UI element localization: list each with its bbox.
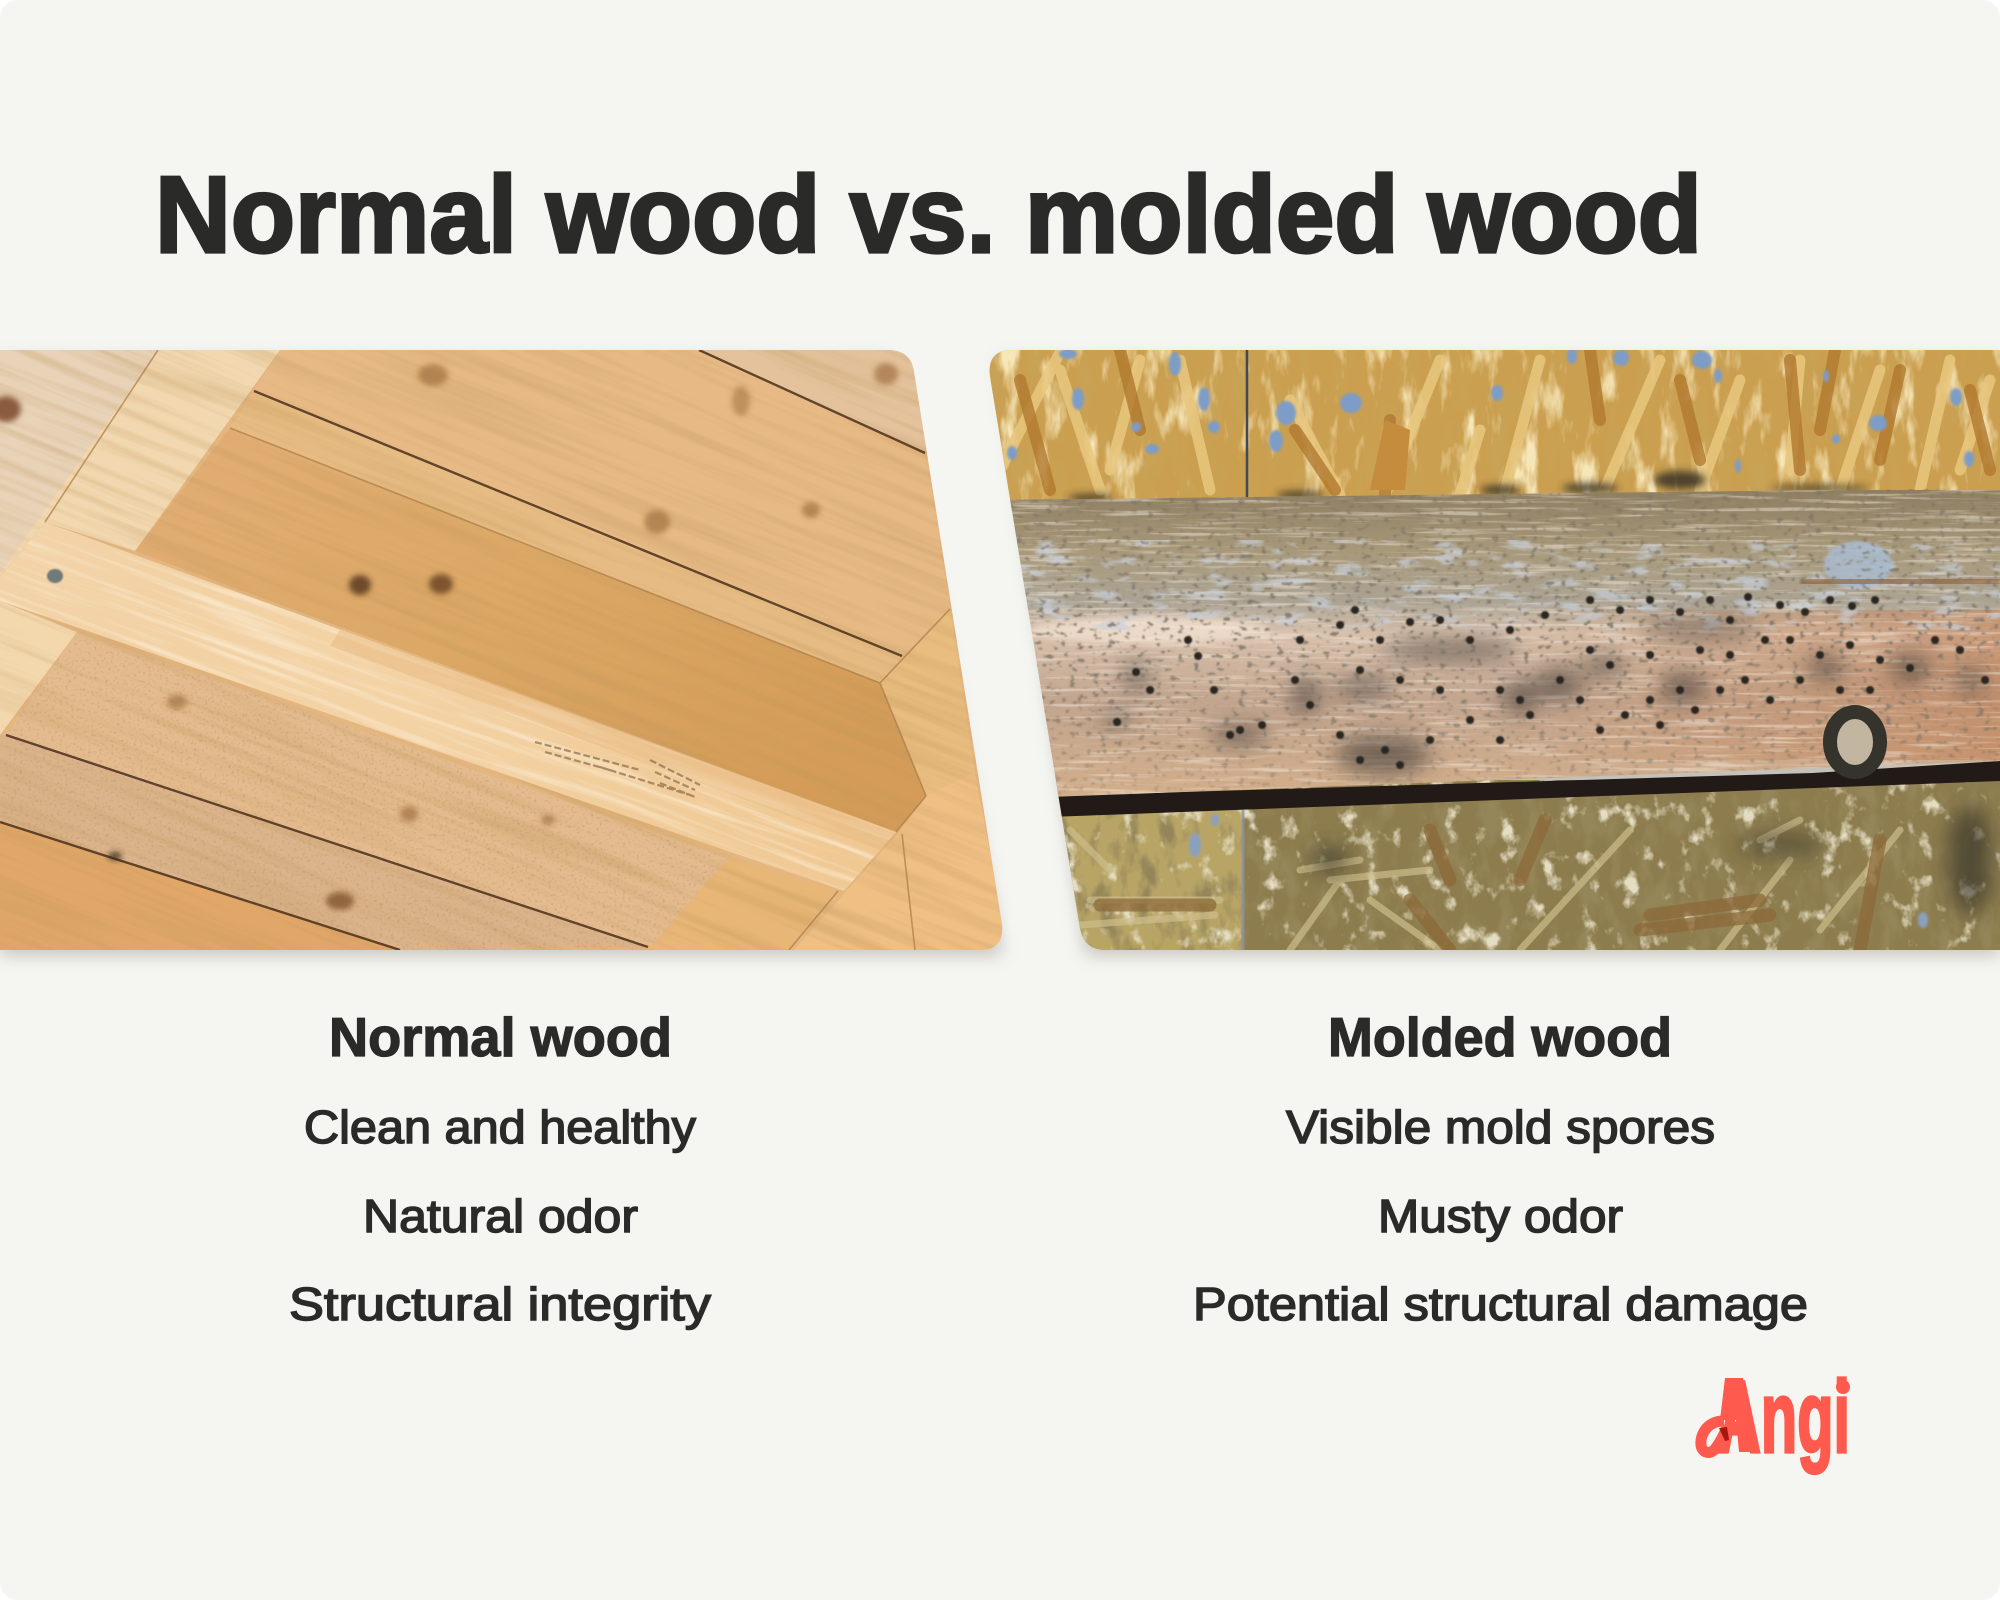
narrow board xyxy=(230,391,902,683)
seams and dark lines xyxy=(0,350,925,950)
upper OSB plank block xyxy=(1370,420,1410,490)
speckled board xyxy=(0,735,648,950)
lower OSB flakes xyxy=(1070,820,1900,950)
logo fold shadow xyxy=(1719,1427,1729,1441)
item: natural odor: Natural odor xyxy=(363,1190,638,1242)
grain texture xyxy=(0,350,1002,950)
round spores xyxy=(1117,597,1985,765)
lower left brighter section xyxy=(1060,808,1243,950)
beam grain xyxy=(980,490,2000,800)
lower OSB board xyxy=(980,780,2000,955)
vertical beam lower section xyxy=(0,601,77,735)
lower OSB dark texture xyxy=(980,780,2000,955)
pale highlights xyxy=(1030,616,1270,644)
logo swirl xyxy=(1701,1421,1727,1452)
middle board xyxy=(135,428,926,832)
title: Normal wood vs. molded wood xyxy=(155,154,1702,276)
lower diagonal beam xyxy=(651,858,838,950)
item: musty odor: Musty odor xyxy=(1378,1190,1623,1242)
heading: molded wood: Molded wood xyxy=(1328,1006,1672,1068)
blue-gray bloom xyxy=(980,540,2000,630)
lower board xyxy=(6,632,728,949)
beam grain xyxy=(0,530,896,891)
upper OSB texture xyxy=(980,350,2000,510)
fine mold specks xyxy=(980,480,2000,810)
soft seams xyxy=(45,350,950,950)
item: visible mold spores: Visible mold spores xyxy=(1286,1101,1715,1153)
lower right boards xyxy=(794,772,1002,950)
lower OSB brown flakes xyxy=(1100,820,1880,950)
salmon tone on right xyxy=(1500,610,2000,760)
mold clusters xyxy=(1101,622,1985,775)
logo dot xyxy=(1836,1380,1850,1394)
speckle on lower boards xyxy=(0,632,728,950)
left column: normal wood xyxy=(289,1006,711,1330)
lower OSB dark patch xyxy=(1312,805,1992,915)
knot ring xyxy=(1830,712,1880,772)
image shadows xyxy=(0,360,2000,955)
item: potential structural damage: Potential structural damage xyxy=(1193,1278,1808,1330)
top left pale boards xyxy=(0,350,158,573)
dark gap xyxy=(1050,761,2000,817)
upper OSB light flakes xyxy=(980,350,2000,510)
logo wordmark: Angi xyxy=(1718,1360,1850,1474)
right column: molded wood xyxy=(1193,1006,1808,1330)
lower seam xyxy=(1242,810,1244,950)
seam xyxy=(1246,350,1248,498)
mold-covered beam xyxy=(980,480,2000,810)
cross beam xyxy=(0,522,896,891)
upper OSB drawn flakes xyxy=(1000,352,1990,500)
panel: normal wood photo xyxy=(0,350,1906,950)
top board xyxy=(254,350,950,656)
bottom left board xyxy=(0,822,400,950)
top right board xyxy=(699,350,930,453)
item: clean and healthy: Clean and healthy xyxy=(304,1101,696,1153)
heading: normal wood: Normal wood xyxy=(329,1006,672,1068)
beam shading xyxy=(330,630,896,850)
upper OSB board xyxy=(980,348,2000,510)
lower blue stains xyxy=(1189,814,1928,928)
brown band xyxy=(1800,580,2000,583)
panel: molded wood photo xyxy=(980,348,2000,955)
screw xyxy=(47,569,63,583)
dark smudges xyxy=(1068,471,1870,502)
blue mold stains xyxy=(1007,348,1974,473)
blue patch xyxy=(1824,541,1892,589)
lower OSB pale texture xyxy=(980,780,2000,955)
vertical beam xyxy=(0,350,280,577)
logo letter A body xyxy=(1720,1378,1755,1452)
logo: Angi xyxy=(1701,1360,1850,1474)
knots xyxy=(0,363,898,910)
item: structural integrity: Structural integrity xyxy=(289,1278,711,1330)
stamp marks xyxy=(535,742,700,797)
upper OSB dark flakes xyxy=(1020,350,1990,495)
right corner beam xyxy=(880,609,975,796)
